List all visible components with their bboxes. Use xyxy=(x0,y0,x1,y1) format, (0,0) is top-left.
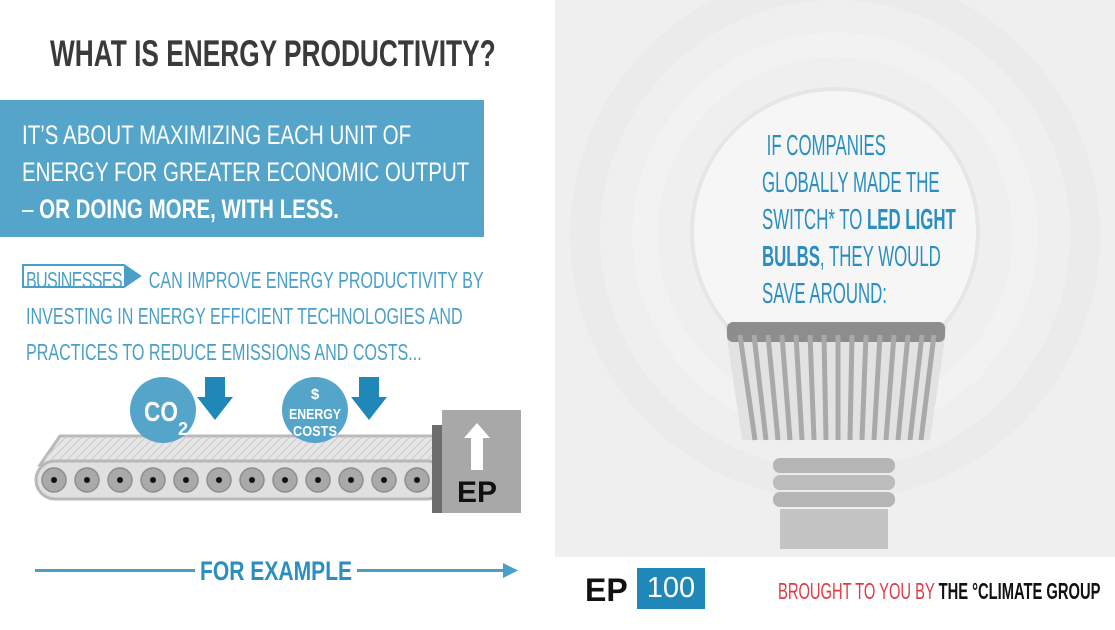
businesses text block: BUSINESSES CAN IMPROVE ENERGY PRODUCTIVITY BY xyxy=(26,267,484,293)
for example arrow xyxy=(35,556,518,586)
blue definition box: ENERGY FOR GREATER ECONOMIC OUTPUT xyxy=(22,157,469,187)
CO2 bubble xyxy=(130,377,196,443)
CO2 bubble: CO xyxy=(144,396,178,427)
businesses text block: PRACTICES TO REDUCE EMISSIONS AND COSTS... xyxy=(26,339,422,365)
conveyor belt illustration xyxy=(34,377,521,513)
energy costs bubble: COSTS xyxy=(293,423,337,440)
bulb text: GLOBALLY MADE THE xyxy=(762,167,940,199)
brought to you by: BROUGHT TO YOU BY THE °CLIMATE GROUP xyxy=(778,578,1100,604)
energy costs bubble: ENERGY xyxy=(289,406,341,423)
bulb text: BULBS, THEY WOULD xyxy=(762,241,941,273)
EP100 logo xyxy=(585,568,705,609)
bulb text xyxy=(762,130,956,310)
EP100 logo: EP xyxy=(585,572,628,608)
arrow down costs xyxy=(351,377,387,420)
bulb text: IF COMPANIES xyxy=(767,130,886,162)
bulb text: SWITCH* TO LED LIGHT xyxy=(762,204,956,236)
blue definition box: IT’S ABOUT MAXIMIZING EACH UNIT OF xyxy=(22,120,411,150)
blue definition box xyxy=(0,100,484,237)
for example arrow: FOR EXAMPLE xyxy=(200,556,352,586)
arrow down CO2 xyxy=(197,377,233,420)
bulb text: SAVE AROUND: xyxy=(762,278,887,310)
EP100 logo: 100 xyxy=(647,572,695,604)
EP box xyxy=(432,410,521,513)
businesses text block: INVESTING IN ENERGY EFFICIENT TECHNOLOGIES AND xyxy=(26,303,463,329)
businesses text block xyxy=(22,264,484,365)
energy costs bubble: $ xyxy=(311,386,320,403)
CO2 bubble: 2 xyxy=(178,419,188,439)
blue definition box: – OR DOING MORE, WITH LESS. xyxy=(22,194,339,224)
LED bulb illustration xyxy=(690,87,980,549)
businesses arrow label xyxy=(22,264,142,288)
energy costs bubble xyxy=(282,377,348,443)
EP box: EP xyxy=(457,476,497,509)
title: WHAT IS ENERGY PRODUCTIVITY? xyxy=(50,33,496,74)
right panel background xyxy=(555,0,1115,557)
